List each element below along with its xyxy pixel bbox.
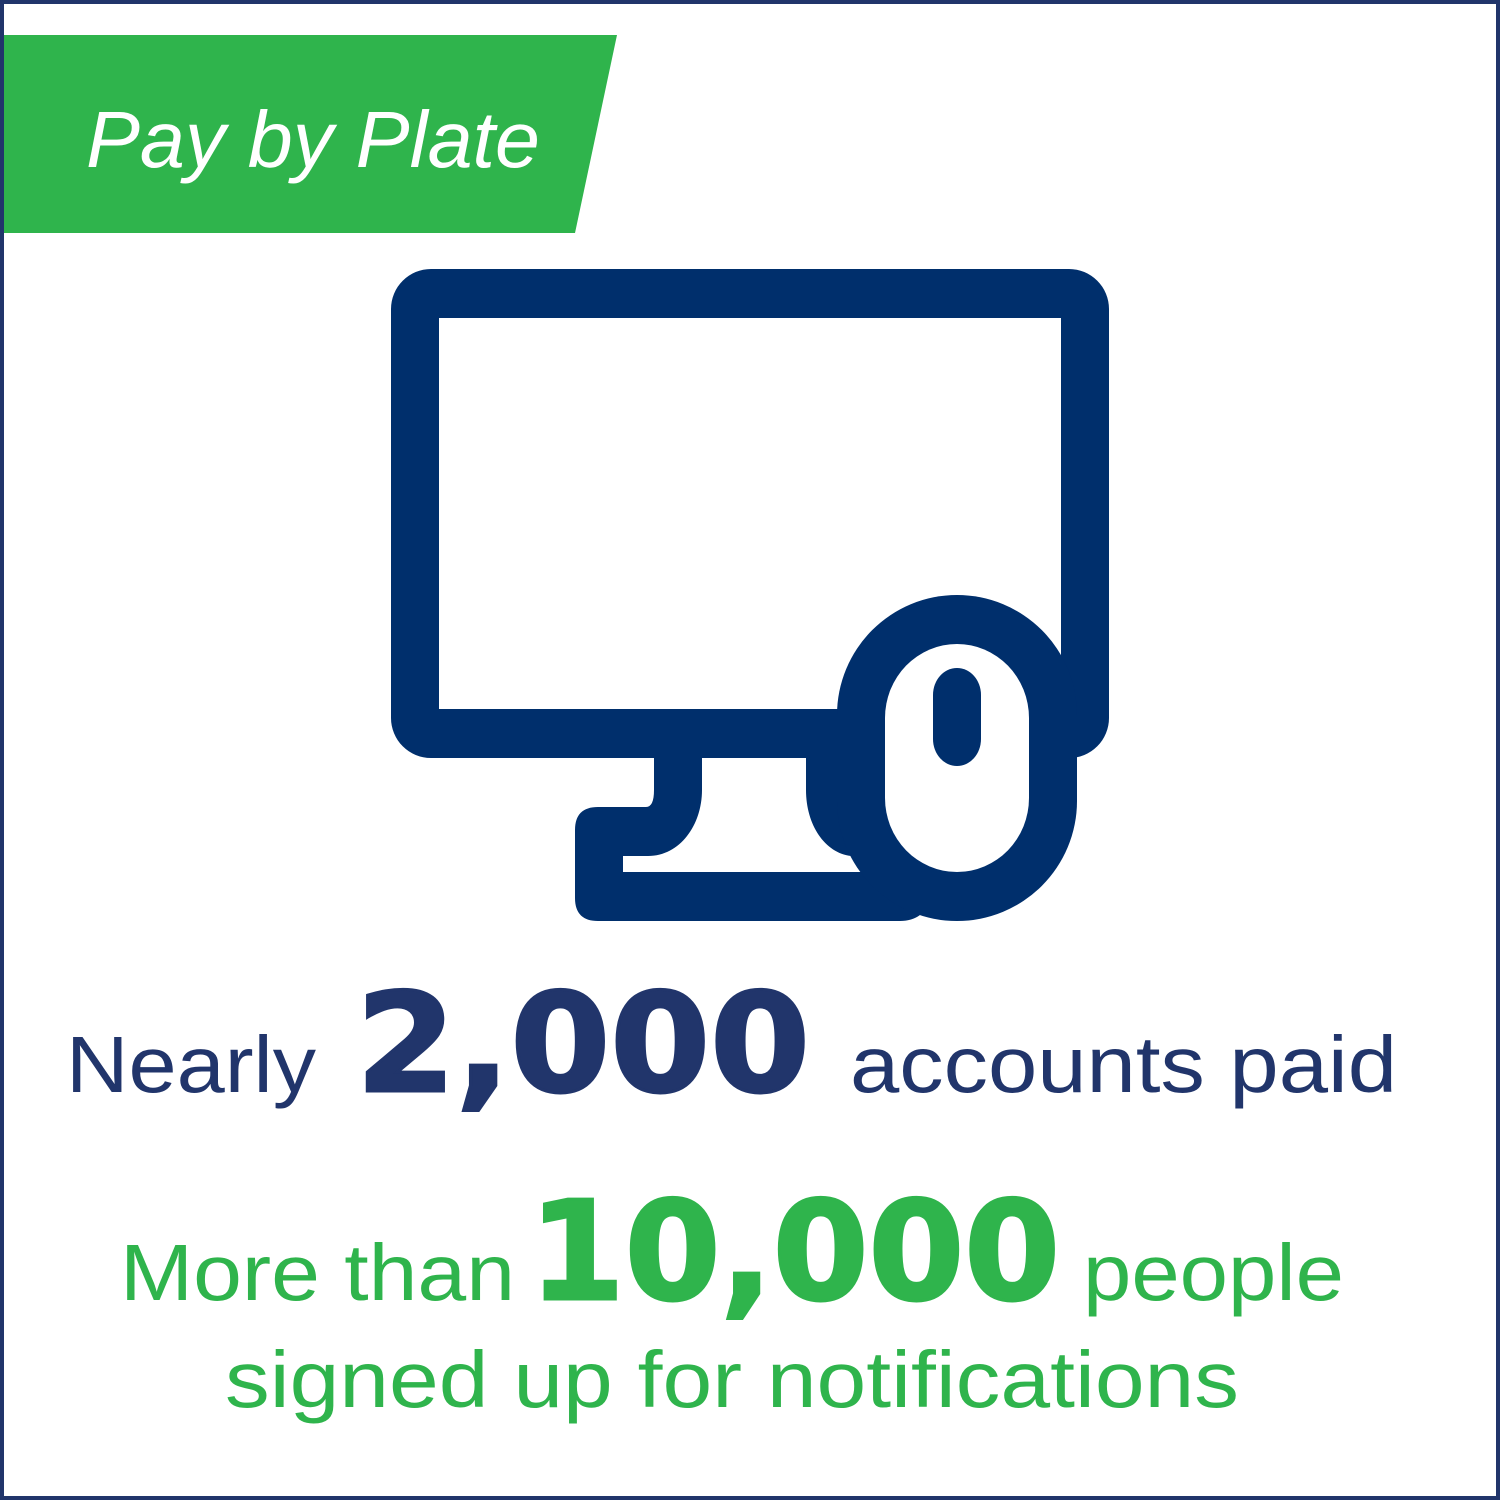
label: nearly: Nearly xyxy=(66,1020,316,1109)
label: signed up for notifications: signed up for notifications xyxy=(225,1335,1239,1424)
mouse inner xyxy=(885,644,1029,872)
icon: computer monitor with mouse xyxy=(391,269,1109,921)
mouse scroll wheel xyxy=(933,668,981,766)
title banner: Pay by Plate xyxy=(86,95,540,184)
monitor frame xyxy=(391,269,1109,758)
label: accounts paid: accounts paid xyxy=(850,1020,1397,1109)
stat: more than 10,000 people signed up xyxy=(120,1173,1344,1424)
label: people: people xyxy=(1083,1228,1344,1317)
number: 10,000: 10,000 xyxy=(529,1173,1060,1332)
mouse body xyxy=(837,595,1077,921)
label: more than: More than xyxy=(120,1228,515,1317)
monitor stand and base xyxy=(575,750,920,921)
title banner xyxy=(4,35,617,233)
stat: nearly 2,000 accounts paid xyxy=(66,965,1397,1124)
number: 2,000: 2,000 xyxy=(356,965,810,1124)
